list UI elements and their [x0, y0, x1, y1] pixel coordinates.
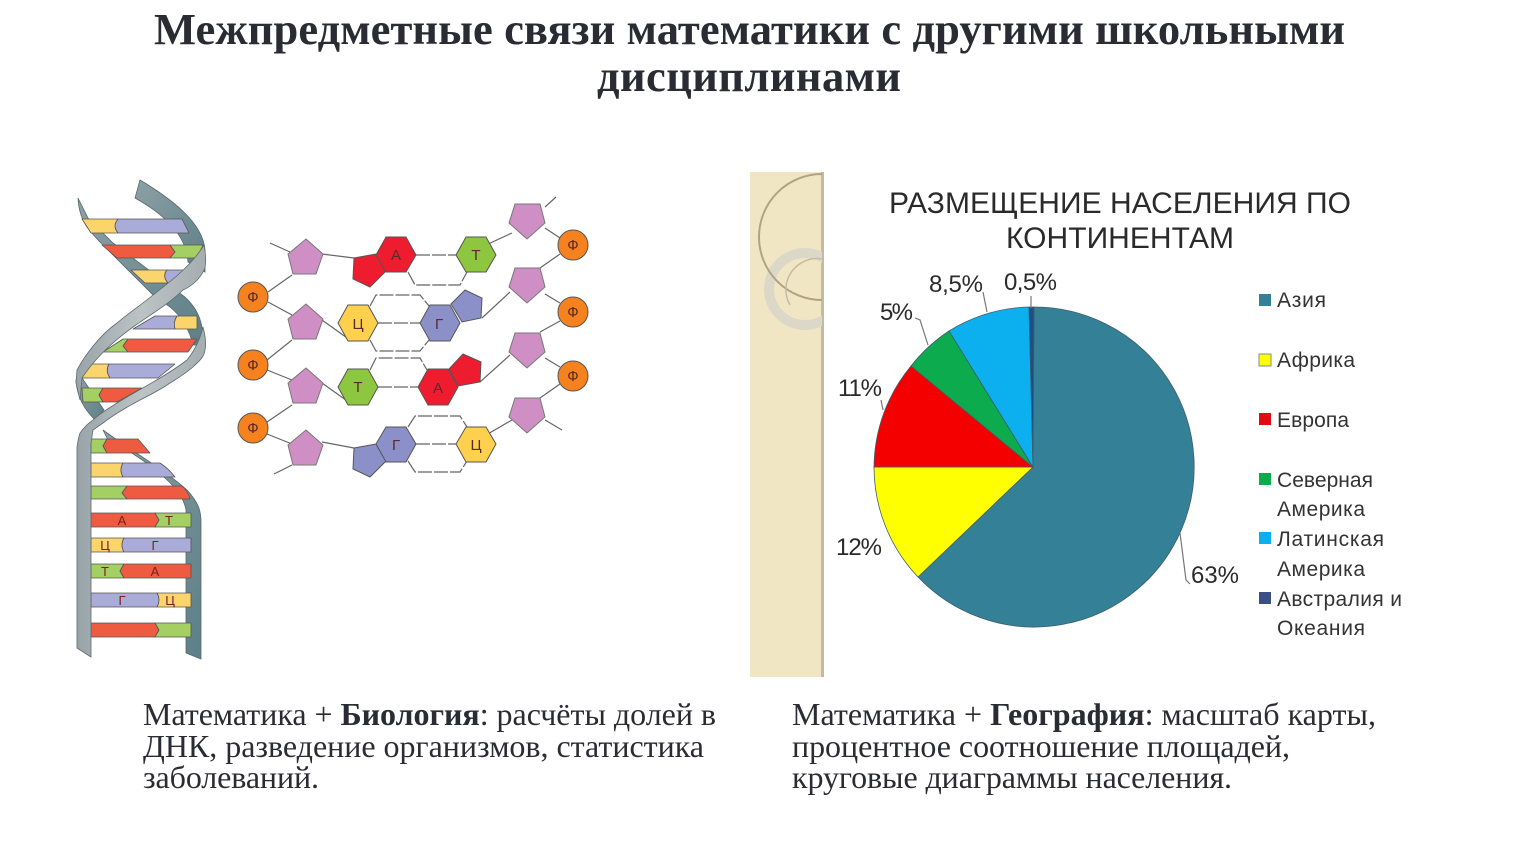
slice: Australia 0.5%: [1029, 307, 1034, 467]
pie percentage labels: 0,5%: [1004, 269, 1057, 296]
base pair letters: А: [118, 513, 127, 528]
base pair letters: Г: [151, 538, 159, 553]
pie percentage labels: 12%: [836, 534, 882, 561]
base letters: [352, 247, 482, 454]
caption: biology: Математика + Биология: расчёты долей в: [143, 696, 716, 732]
title: Межпредметные связи математики с другими школьными: [154, 4, 1345, 54]
caption: geography: круговые диаграммы населения.: [792, 759, 1232, 795]
base pair letters: Т: [165, 513, 173, 528]
caption: geography: процентное соотношение площадей,: [792, 728, 1290, 764]
slice: North America 5%: [911, 331, 1033, 467]
chart legend: Латинская: [1277, 528, 1384, 551]
base letters: А: [391, 247, 401, 264]
base letters: Т: [471, 247, 481, 264]
caption: biology: ДНК, разведение организмов, статистика: [143, 728, 704, 764]
chart legend: Северная: [1277, 469, 1373, 492]
pie leader lines: [881, 292, 1190, 584]
base pair letters: Ц: [165, 593, 175, 608]
title: [154, 4, 1345, 101]
base letters: Ц: [470, 437, 482, 454]
slice: Europe 11%: [874, 366, 1033, 467]
slice: Latin America 8.5%: [949, 307, 1033, 467]
base letters: Ц: [352, 316, 364, 333]
chart legend: Австралия и: [1277, 588, 1402, 611]
chart legend: Океания: [1277, 617, 1365, 640]
caption: biology: заболеваний.: [143, 759, 319, 795]
pie percentage labels: 5%: [880, 299, 913, 326]
base letters: А: [433, 380, 443, 397]
chart legend: Азия: [1277, 289, 1326, 312]
chart legend: [1259, 289, 1402, 640]
base letters: Г: [435, 316, 443, 333]
phosphate circles: Ф: [247, 289, 259, 306]
helix front ribbons: [76, 245, 206, 657]
chart title: РАЗМЕЩЕНИЕ НАСЕЛЕНИЯ ПО: [889, 187, 1351, 220]
connecting bonds: [267, 197, 562, 474]
title: дисциплинами: [597, 51, 901, 101]
phosphate circles: Ф: [247, 357, 259, 374]
pie percentage labels: 8,5%: [929, 271, 983, 298]
phosphate circles: Ф: [567, 304, 579, 321]
base letters: Г: [392, 437, 400, 454]
nitrogen bases: [338, 237, 496, 477]
phosphate circles: Ф: [567, 368, 579, 385]
base pair letters: Т: [101, 564, 109, 579]
helix back ribbons: [76, 180, 205, 659]
chart legend: Америка: [1277, 498, 1365, 521]
illustration: DNA double helix: [76, 180, 206, 659]
base pair letters: Г: [118, 593, 126, 608]
pie percentage labels: 63%: [1191, 562, 1239, 589]
caption: geography: Математика + География: масштаб карты,: [792, 696, 1376, 732]
sugar pentagons: [288, 204, 545, 465]
base pair letters: А: [151, 564, 160, 579]
chart title: [889, 187, 1351, 255]
phosphate circles: [238, 230, 588, 443]
chart legend: Америка: [1277, 558, 1365, 581]
chart legend: Африка: [1277, 349, 1355, 372]
slice: Africa 12%: [874, 467, 1033, 577]
base pair letters: Ц: [100, 538, 110, 553]
pie percentage labels: [836, 269, 1239, 589]
chart legend: Европа: [1277, 409, 1349, 432]
slice: Asia 63%: [918, 307, 1194, 627]
caption: geography: [792, 696, 1376, 795]
caption: biology: [143, 696, 716, 795]
decorative beige side panel: [750, 172, 824, 677]
base pair letters: [100, 513, 175, 608]
base pair bars: [82, 219, 203, 637]
chart title: КОНТИНЕНТАМ: [1006, 222, 1234, 255]
illustration: DNA molecular diagram: [238, 197, 588, 477]
pie percentage labels: 11%: [838, 375, 882, 402]
hydrogen bonds: [370, 255, 467, 472]
pie chart: population by continent: [874, 307, 1194, 627]
base letters: Т: [353, 379, 363, 396]
phosphate circles: Ф: [247, 420, 259, 437]
phosphate circles: Ф: [567, 237, 579, 254]
